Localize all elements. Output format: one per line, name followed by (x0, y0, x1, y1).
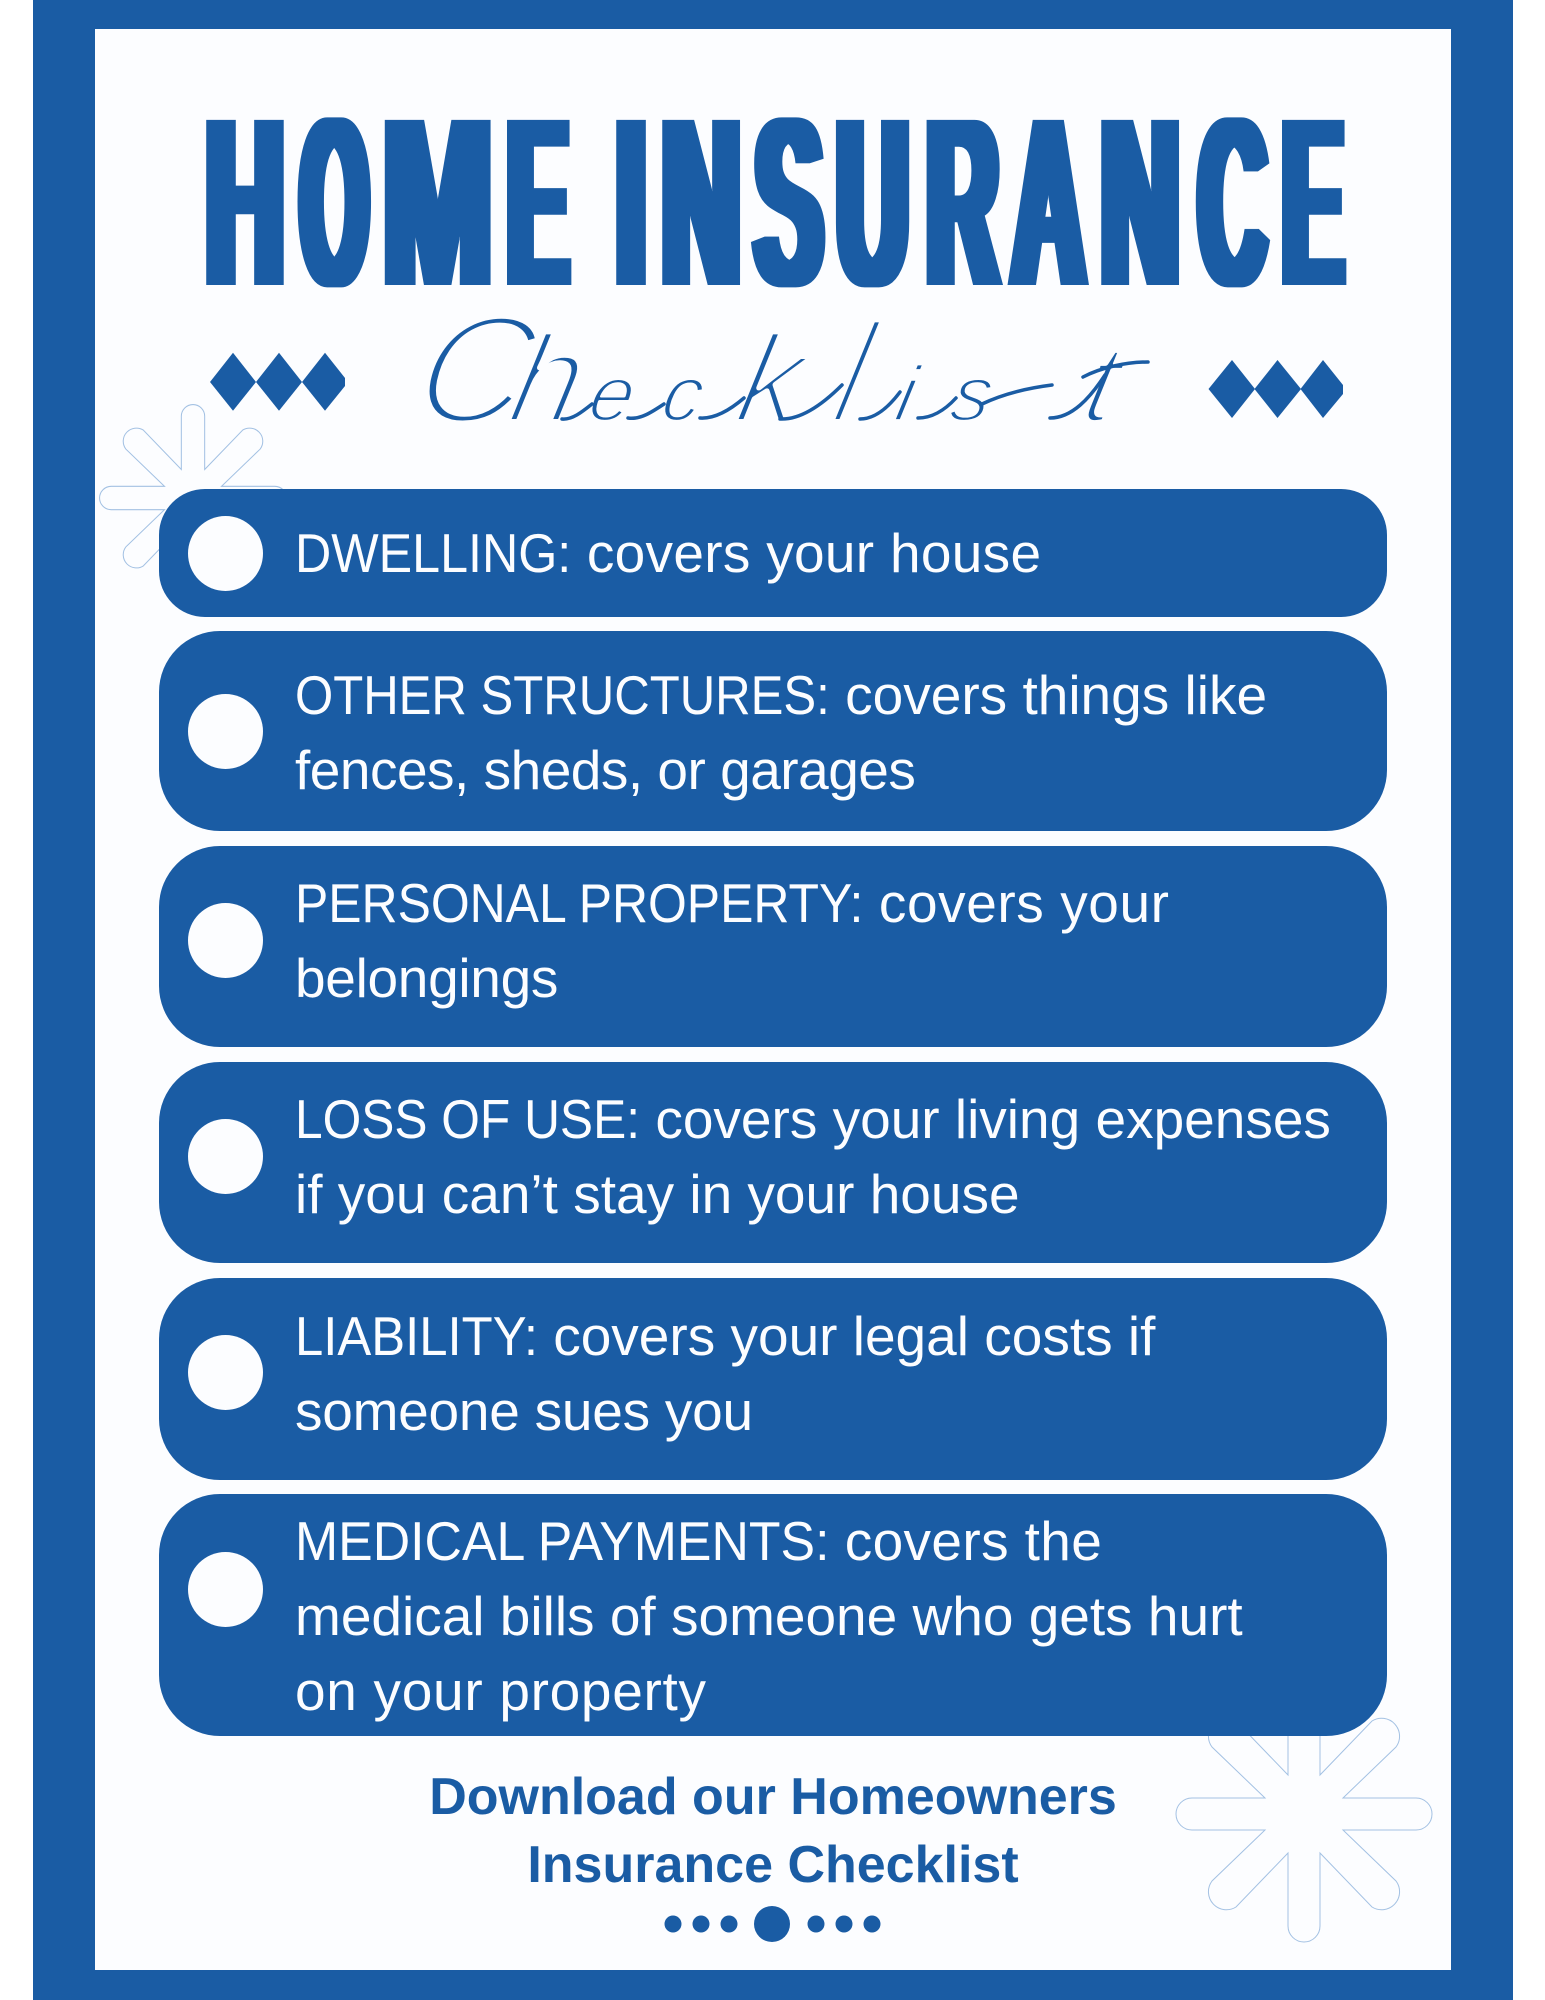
text: loss of use (295, 1088, 1331, 1225)
text: other structures: fences, sheds, or garages (295, 738, 915, 800)
title: HOME INSURANCE: E (1283, 68, 1343, 336)
checkbox circle (188, 516, 263, 590)
text: medical payments: medical bills of someone who gets hurt (295, 1585, 1243, 1647)
checkbox circle (188, 1335, 263, 1410)
subtitle: Checklist: k (727, 309, 825, 449)
text: personal property: PERSONAL PROPERTY: (295, 872, 863, 934)
title: HOME INSURANCE: N (662, 68, 740, 336)
title: HOME INSURANCE: N (1101, 68, 1179, 336)
text: dwelling: covers your house (587, 522, 1041, 584)
title: HOME INSURANCE (206, 68, 1346, 336)
text: personal property: belongings (295, 947, 558, 1009)
text: medical payments: on your property (295, 1660, 707, 1722)
title: HOME INSURANCE: R (927, 68, 998, 336)
text: medical payments (295, 1510, 1243, 1722)
panel: other structures item (159, 631, 1387, 831)
call to action text (429, 1768, 1117, 1894)
subtitle: Checklist (402, 284, 1148, 457)
title: HOME INSURANCE: C (1199, 68, 1266, 336)
icon: left diamonds (210, 353, 345, 411)
subtitle: Checklist: e (582, 350, 644, 437)
text: other structures: covers things like (845, 664, 1267, 726)
subtitle: Checklist: s (944, 350, 1002, 437)
subtitle: Checklist: h (500, 309, 599, 449)
panel: medical payments item (159, 1494, 1387, 1736)
panel: loss of use item (159, 1062, 1387, 1263)
subtitle: Checklist: i (889, 350, 927, 437)
title: HOME INSURANCE: M (383, 68, 493, 336)
call to action text: Insurance Checklist (527, 1836, 1019, 1894)
subtitle: Checklist: t (1074, 322, 1135, 445)
checkbox circle (188, 694, 263, 769)
text: other structures (295, 664, 1267, 800)
title: HOME INSURANCE: U (837, 68, 908, 336)
checkbox circle (188, 1552, 263, 1626)
text: liability (295, 1304, 1156, 1442)
text: dwelling: DWELLING: (295, 522, 571, 584)
text: medical payments: MEDICAL PAYMENTS: (295, 1510, 829, 1572)
subtitle: Checklist: c (655, 350, 713, 437)
checkbox circle (188, 1118, 263, 1194)
panel: liability item (159, 1278, 1387, 1480)
text: liability: covers your legal costs if (553, 1304, 1155, 1366)
icon: right diamonds (1208, 360, 1343, 418)
text: loss of use: if you can’t stay in your house (295, 1163, 1020, 1225)
text: personal property: covers your (879, 872, 1170, 934)
title: HOME INSURANCE: O (301, 68, 367, 336)
subtitle: Checklist: C (402, 284, 553, 457)
text: loss of use: covers your living expenses (655, 1088, 1331, 1150)
text: liability: LIABILITY: (295, 1304, 538, 1366)
icon: bottom-right starburst outline (1176, 1686, 1432, 1942)
call to action text: Download our Homeowners (429, 1768, 1117, 1826)
icon: top-left starburst outline (100, 405, 286, 591)
text: personal property (295, 872, 1170, 1009)
title: HOME INSURANCE: E (508, 68, 568, 336)
title: HOME INSURANCE: I (616, 68, 646, 336)
text: liability: someone sues you (295, 1380, 753, 1442)
subtitle: Checklist: l (820, 293, 890, 455)
checkbox circle (188, 902, 263, 978)
text: other structures: OTHER STRUCTURES: (295, 664, 830, 726)
panel: personal property item (159, 846, 1387, 1047)
text: medical payments: covers the (845, 1510, 1102, 1572)
panel: dwelling item (159, 489, 1387, 617)
decorative dot row (664, 1906, 880, 1942)
text: dwelling (295, 522, 1041, 584)
title: HOME INSURANCE: S (755, 68, 822, 336)
text: loss of use: LOSS OF USE: (295, 1088, 640, 1150)
title: HOME INSURANCE: A (1012, 68, 1085, 336)
title: HOME INSURANCE: H (206, 68, 284, 336)
decorative script connectors (562, 362, 1148, 419)
